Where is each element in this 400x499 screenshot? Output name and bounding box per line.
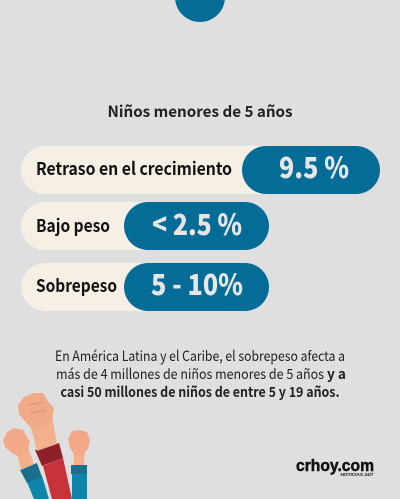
paragraph: y a <box>327 364 346 384</box>
bar: sobrepeso <box>21 262 269 311</box>
logo tagline: NOTICIAS 24/7 <box>340 472 374 477</box>
bar: bajo peso <box>21 202 269 250</box>
bar: retraso en el crecimiento <box>21 145 380 194</box>
left arm <box>3 428 49 499</box>
right arm <box>68 430 90 499</box>
center arm <box>18 393 72 499</box>
illustration: raised fists <box>3 393 90 499</box>
label: retraso: Retraso en el crecimiento <box>36 156 232 181</box>
label: bajo peso: Bajo peso <box>36 213 110 238</box>
value: 9.5 %: 9.5 % <box>279 145 349 187</box>
value: 5 - 10%: 5 - 10% <box>151 262 243 304</box>
paragraph <box>55 346 346 402</box>
paragraph: casi 50 millones de niños de entre 5 y 19 años. <box>60 382 340 402</box>
paragraph: más de 4 millones de niños menores de 5 años <box>56 364 324 384</box>
title: Niños menores de 5 años <box>108 100 293 122</box>
center fist finger shading <box>28 402 46 413</box>
label: sobrepeso: Sobrepeso <box>36 273 117 298</box>
value: < 2.5 %: < 2.5 % <box>152 202 242 244</box>
paragraph: En América Latina y el Caribe, el sobrepeso afecta a <box>55 346 345 366</box>
top semicircle decoration <box>175 0 225 22</box>
logo: crhoy.com: crhoy.com <box>296 456 374 475</box>
